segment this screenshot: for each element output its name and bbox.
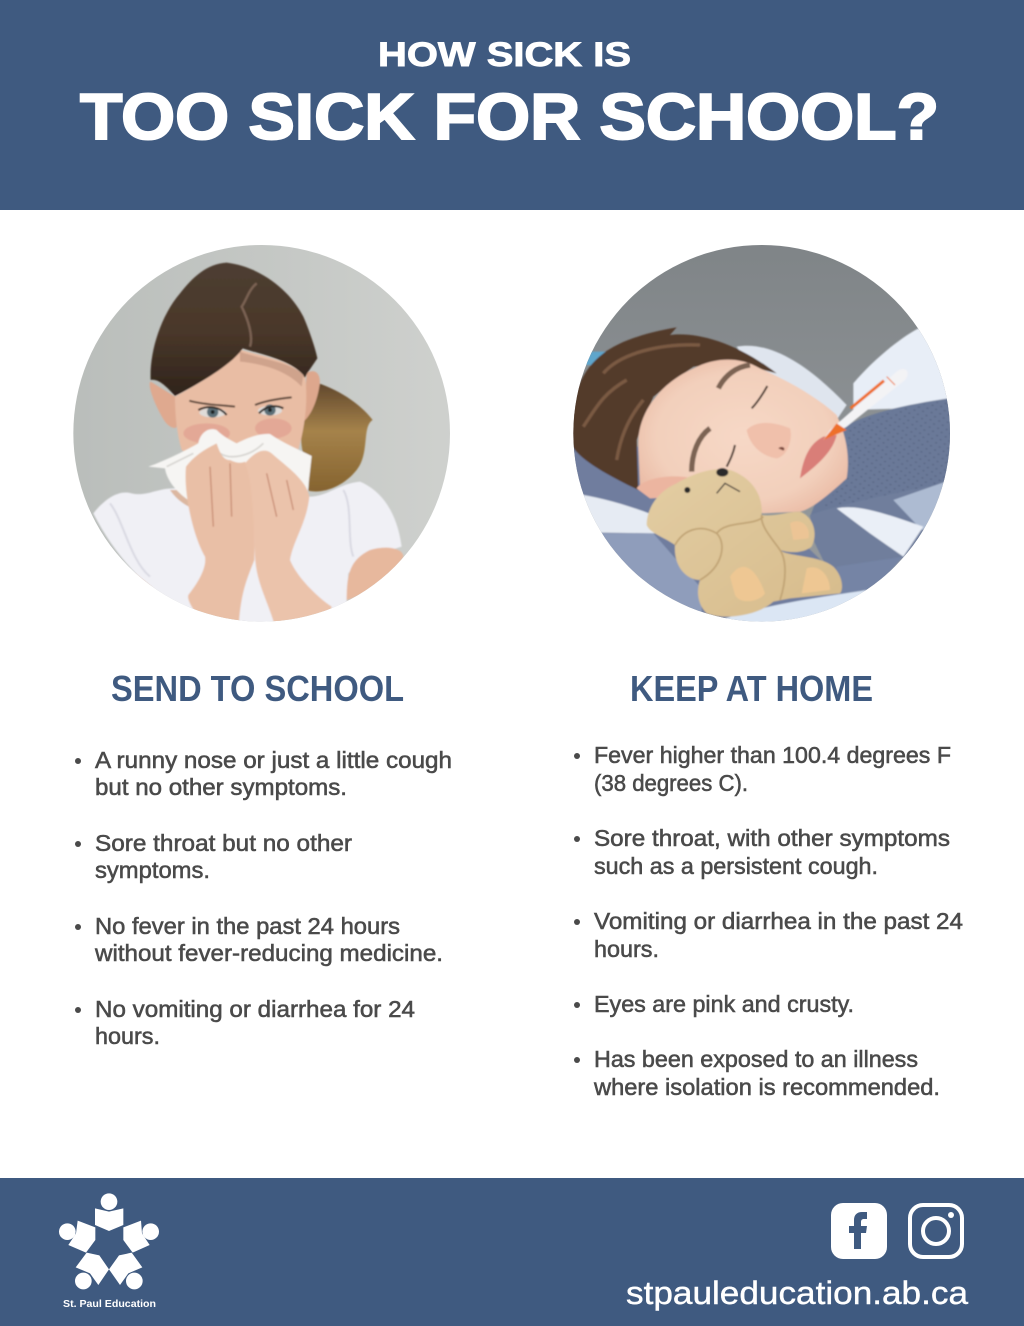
heading: keep at home: KEEP AT HOME bbox=[630, 668, 873, 709]
list: send to school: without fever-reducing medicine. bbox=[94, 940, 443, 966]
list: send to school: Sore throat but no other bbox=[95, 830, 352, 856]
title bbox=[80, 36, 939, 153]
list: keep at home: hours. bbox=[594, 936, 659, 962]
website address: stpauleducation.ab.ca bbox=[626, 1275, 968, 1311]
list: keep at home: Vomiting or diarrhea in the past 24 bbox=[594, 908, 963, 934]
list: keep at home: Sore throat, with other symptoms bbox=[594, 825, 950, 851]
icon: facebook bbox=[831, 1203, 887, 1259]
photo: sleeping boy with thermometer and teddy bbox=[560, 240, 960, 630]
list: keep at home: Eyes are pink and crusty. bbox=[594, 991, 854, 1017]
title: TOO SICK FOR SCHOOL? bbox=[80, 80, 939, 153]
title: HOW SICK IS bbox=[378, 36, 631, 74]
list: keep at home: Has been exposed to an illness bbox=[594, 1046, 918, 1072]
footer banner bbox=[0, 1178, 1024, 1326]
header banner bbox=[0, 0, 1024, 210]
list: keep at home bbox=[574, 742, 963, 1100]
photo: girl blowing nose bbox=[60, 240, 460, 633]
logo: St. Paul Education: St. Paul Education bbox=[63, 1299, 156, 1310]
list: send to school: but no other symptoms. bbox=[95, 774, 347, 800]
logo: St. Paul Education bbox=[59, 1193, 159, 1310]
list: keep at home: (38 degrees C). bbox=[594, 770, 748, 796]
heading: send to school: SEND TO SCHOOL bbox=[111, 668, 404, 709]
list: send to school: A runny nose or just a little cough bbox=[95, 747, 452, 773]
list: send to school: symptoms. bbox=[95, 857, 210, 883]
list: keep at home: where isolation is recommended. bbox=[593, 1074, 940, 1100]
list: send to school bbox=[75, 747, 452, 1049]
list: send to school: No vomiting or diarrhea for 24 bbox=[95, 996, 415, 1022]
list: keep at home: Fever higher than 100.4 degrees F bbox=[594, 742, 951, 768]
list: send to school: No fever in the past 24 hours bbox=[95, 913, 400, 939]
icon: instagram bbox=[910, 1205, 962, 1257]
list: send to school: hours. bbox=[95, 1023, 160, 1049]
list: keep at home: such as a persistent cough. bbox=[594, 853, 878, 879]
